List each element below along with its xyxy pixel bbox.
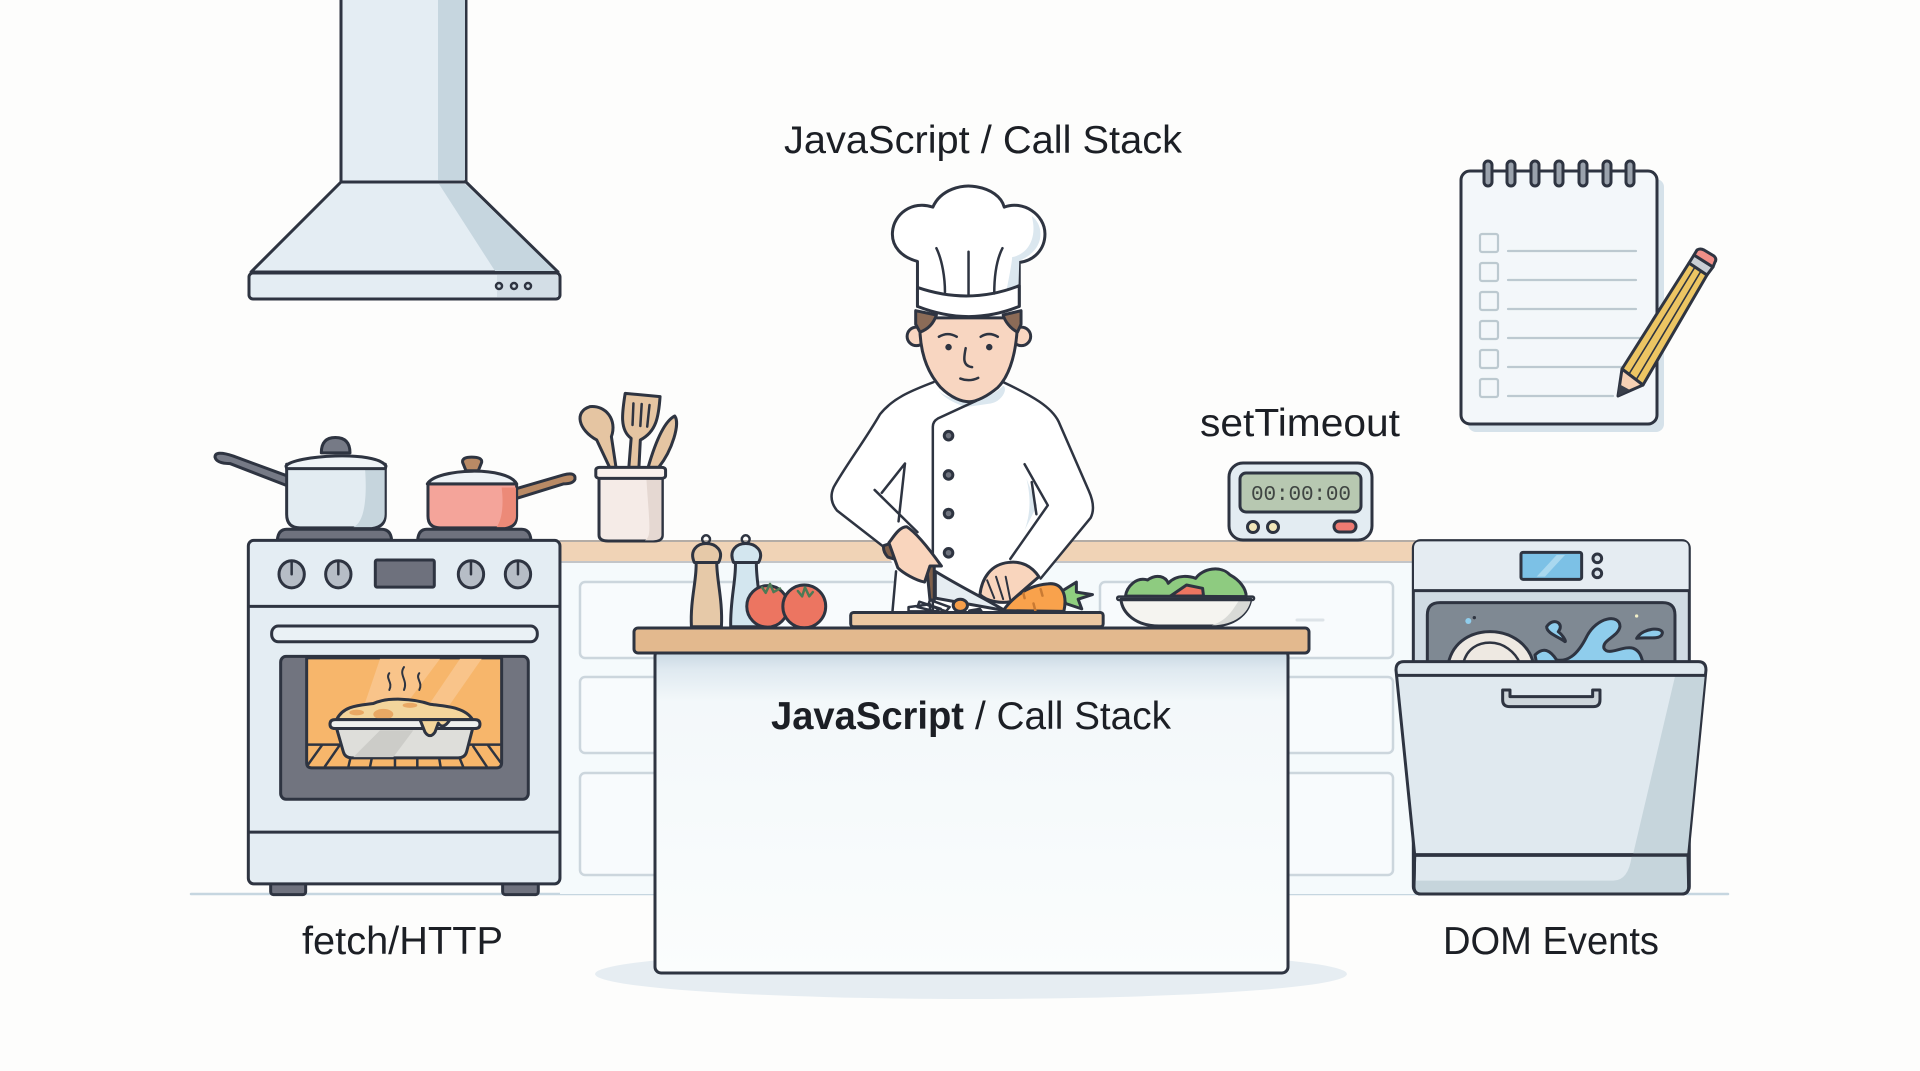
chef head (907, 311, 1031, 402)
oven rack (308, 745, 501, 767)
label: JavaScript / Call Stack (island): JavaScript (771, 695, 964, 738)
oven body (248, 540, 560, 884)
knife (926, 564, 1005, 611)
lower drawer line (249, 831, 559, 834)
burners (277, 529, 531, 540)
island counter (634, 628, 1309, 973)
jacket buttons (944, 431, 953, 557)
carrot (1003, 582, 1092, 611)
sliced vegetables (909, 599, 982, 612)
control panel (249, 560, 559, 606)
label: JavaScript / Call Stack (top): JavaScript / Call Stack (784, 119, 1183, 162)
floor line (191, 893, 1728, 895)
dishwasher (1396, 541, 1706, 894)
dishwasher interior with plate and water (1427, 603, 1675, 663)
label: DOM Events: DOM Events (1443, 920, 1659, 963)
steam (388, 667, 420, 690)
checklist (1480, 234, 1640, 397)
chef (691, 186, 1103, 628)
island shadow (595, 949, 1347, 999)
salt shaker (731, 535, 761, 627)
pie in dish (330, 699, 480, 758)
red pot (427, 457, 575, 528)
label: fetch/HTTP: fetch/HTTP (302, 920, 503, 963)
pepper mill (691, 535, 722, 627)
chef right hand (980, 562, 1039, 602)
spiral rings (1484, 161, 1634, 186)
label: JavaScript / Call Stack (island) (771, 695, 1171, 738)
oven handle (272, 626, 537, 642)
stove with pots and oven: fetch/HTTP (215, 437, 575, 895)
timer (1229, 463, 1372, 540)
pencil (1618, 249, 1716, 396)
cutting board (851, 612, 1103, 627)
chef jacket (832, 382, 1093, 612)
salad bowl (1117, 569, 1254, 626)
dishwasher display (1521, 552, 1602, 579)
timer display: 00:00:00 (1251, 484, 1351, 507)
oven window (281, 656, 528, 799)
dishwasher base (1414, 855, 1689, 894)
oven feet (271, 880, 538, 895)
label: setTimeout: setTimeout (1200, 402, 1400, 445)
notepad (1461, 161, 1716, 432)
base cabinets and back counter (560, 541, 1420, 894)
utensil jar (580, 393, 677, 541)
chef hat (892, 186, 1045, 317)
dishwasher door (1396, 662, 1706, 855)
steel pot (215, 437, 386, 528)
range hood (249, 0, 560, 299)
tomatoes (747, 584, 826, 628)
label: JavaScript / Call Stack (island): / Call Stack (975, 695, 1171, 738)
chef left hand (883, 527, 941, 582)
